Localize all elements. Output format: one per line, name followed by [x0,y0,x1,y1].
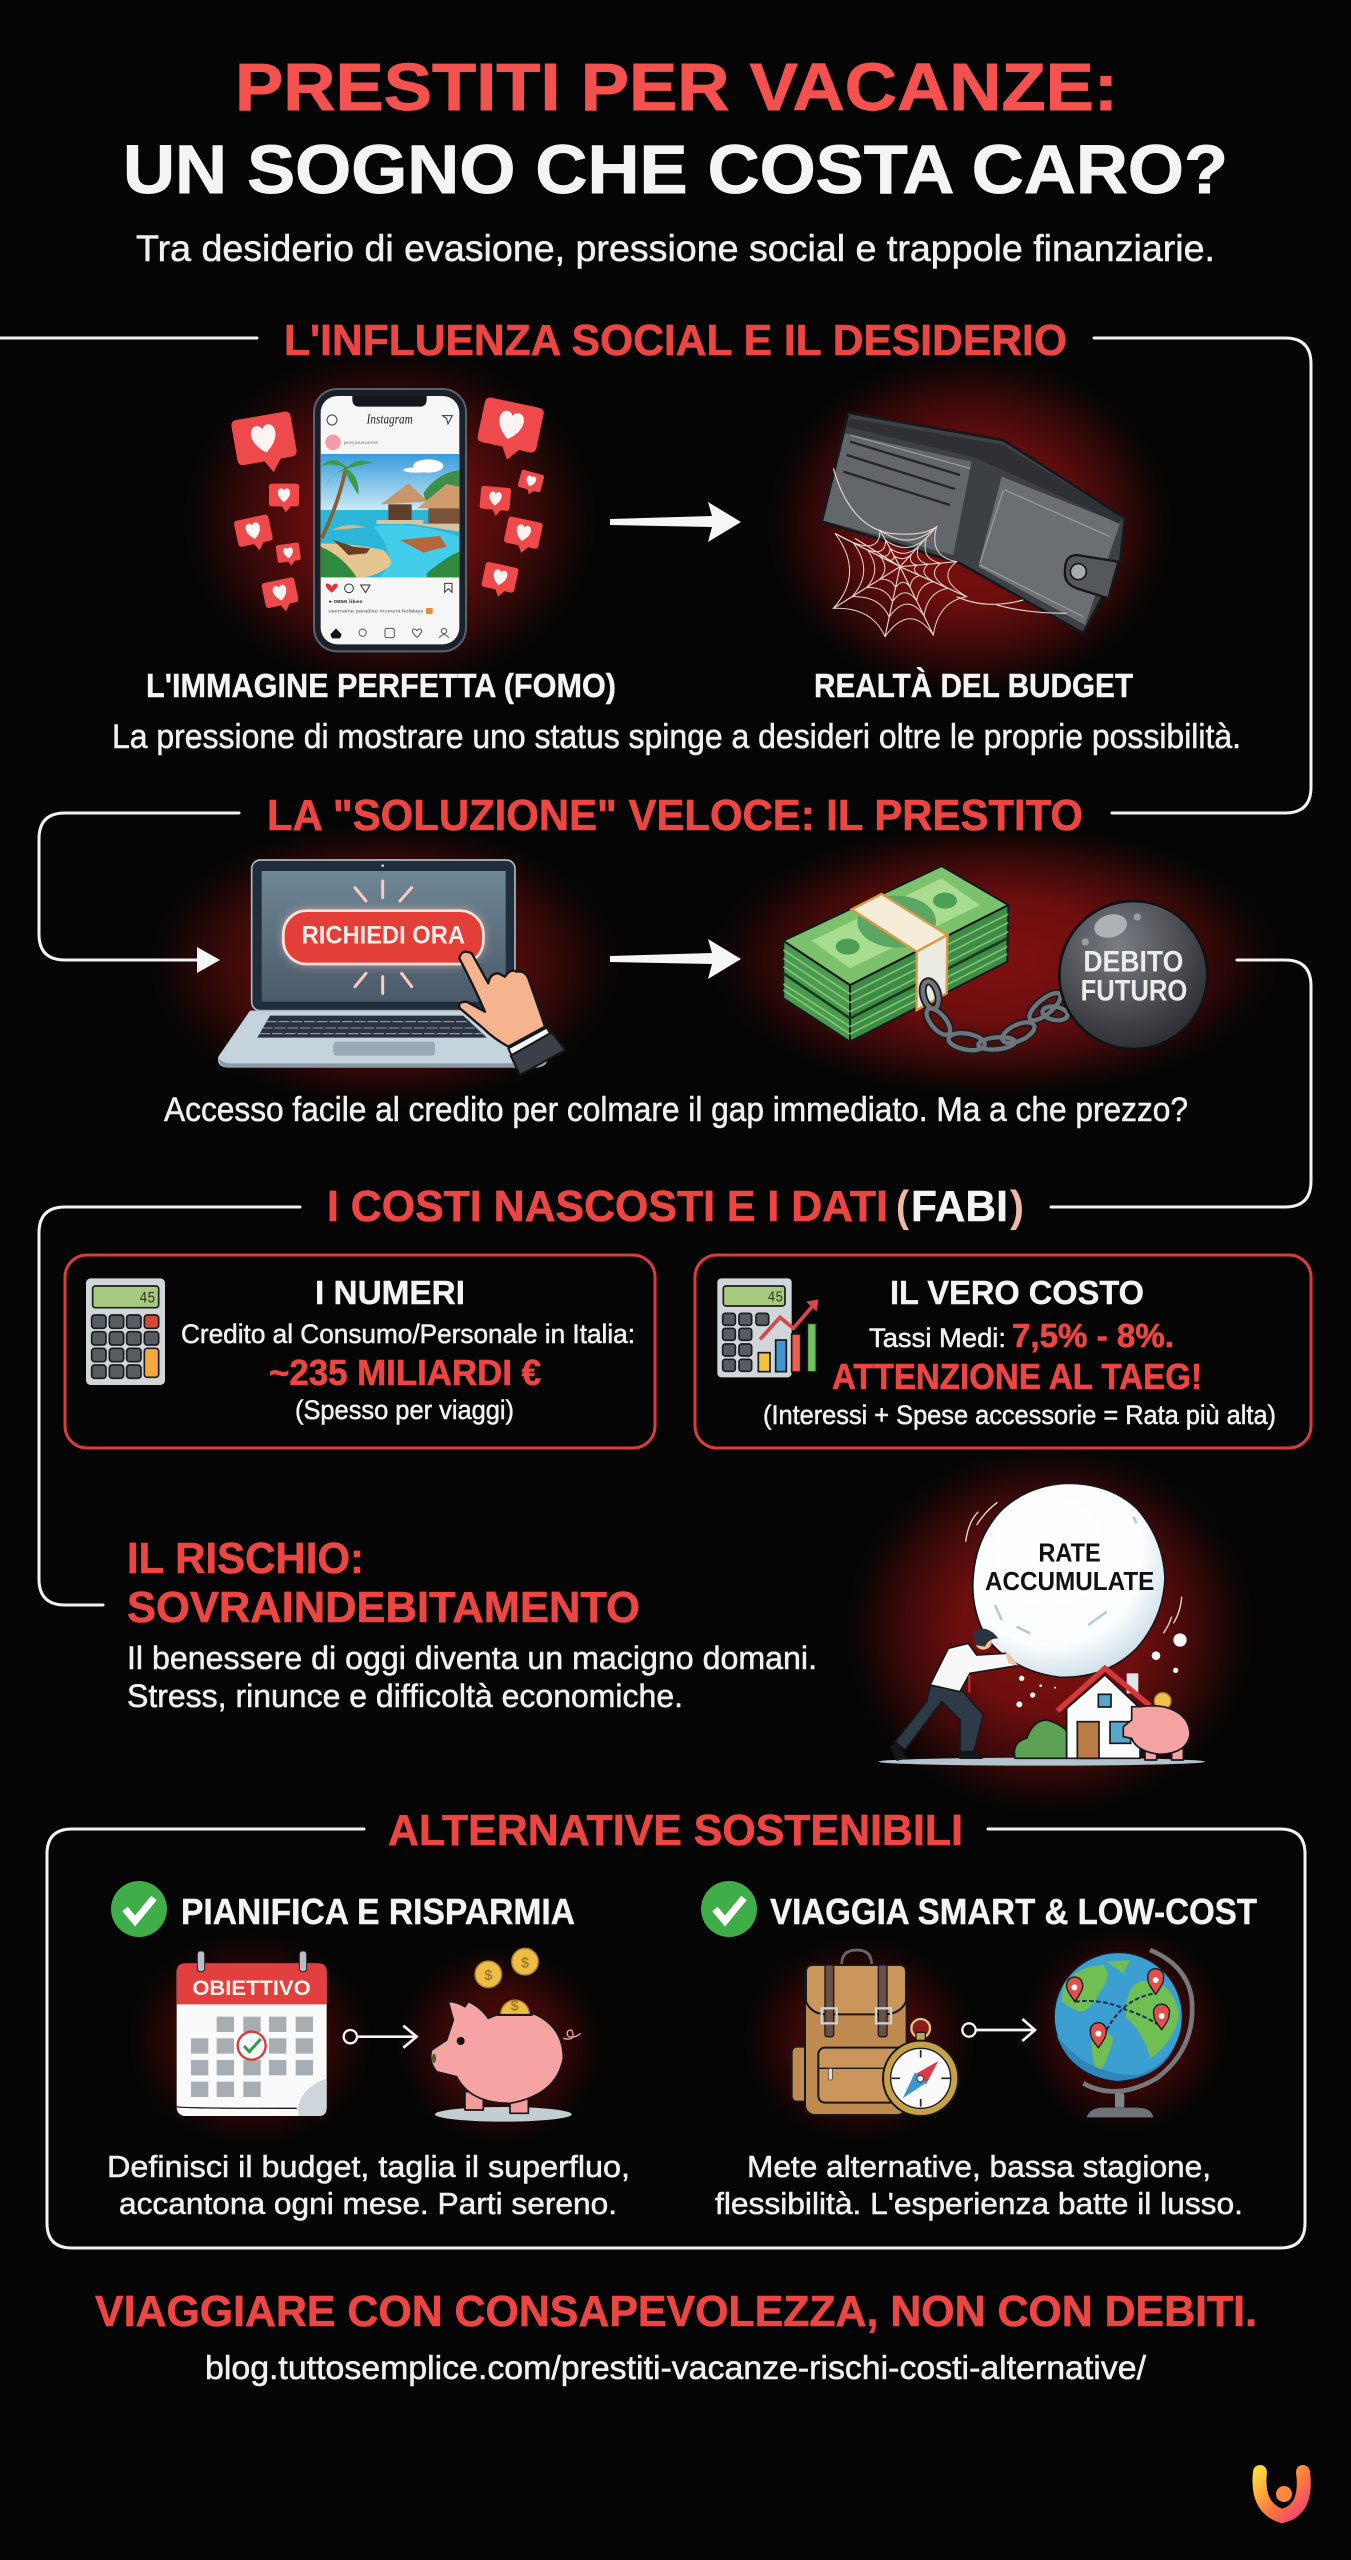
title: UN SOGNO CHE COSTA CARO? [123,131,1228,208]
panel: viaggia smart: VIAGGIA SMART & LOW-COST [770,1891,1257,1932]
icon: calendar and piggy bank: $ [484,1968,492,1984]
icon: cash stack chained to debt ball [783,866,1207,1053]
text block: il rischio: Stress, rinunce e difficoltà economiche. [127,1678,683,1714]
panel: i numeri [65,1255,655,1448]
icon: green check [701,1881,757,1937]
panel: i numeri: (Spesso per viaggi) [295,1395,514,1425]
subtitle: Tra desiderio di evasione, pressione social e trappole finanziarie. [136,228,1215,269]
icon: calendar and piggy bank: $ [511,1998,519,2014]
panel: viaggia smart: Mete alternative, bassa stagione, [747,2149,1211,2184]
arrow head [197,947,220,973]
icon: cash stack chained to debt ball: DEBITO [1083,946,1183,979]
icon: phone with Instagram post and hearts [230,389,545,651]
panel: il vero costo [695,1255,1311,1448]
icon: calculator: 45 [139,1290,155,1308]
panel: pianifica e risparmia [107,1881,630,2221]
heading: costi nascosti: FABI [911,1182,1008,1231]
icon: man pushing boulder of instalments: RATE [1038,1538,1101,1568]
icon: calendar and piggy bank [177,1948,581,2122]
panel: i numeri: Credito al Consumo/Personale in Italia: [181,1319,635,1349]
footer message: VIAGGIARE CON CONSAPEVOLEZZA, NON CON DEBITI. [95,2287,1257,2336]
panel: il vero costo: (Interessi + Spese accessorie = Rata più alta) [763,1400,1276,1430]
icon: man pushing boulder of instalments: ACCUMULATE [985,1566,1154,1596]
panel: i numeri: I NUMERI [315,1274,465,1311]
panel: pianifica e risparmia: PIANIFICA E RISPARMIA [181,1891,575,1932]
text block: il rischio: Il benessere di oggi diventa un macigno domani. [127,1640,817,1676]
text: pressione: La pressione di mostrare uno status spinge a desideri oltre le proprie possibilità. [112,718,1241,756]
panel: il vero costo: IL VERO COSTO [890,1274,1144,1311]
panel: i numeri: ~235 MILIARDI € [269,1352,541,1393]
icon: calendar and piggy bank: OBIETTIVO [192,1976,311,2000]
text: accesso: Accesso facile al credito per colmare il gap immediato. Ma a che prezzo? [164,1091,1188,1129]
panel: viaggia smart [701,1881,1257,2221]
icon: phone with Instagram post and hearts: username paradise moment holidays [328,609,424,614]
icon: man pushing boulder of instalments [878,1483,1205,1766]
icon: calculator with rising chart: 45 [768,1290,783,1306]
icon: laptop with button and hand: RICHIEDI ORA [302,922,465,949]
label: realtà del budget: REALTÀ DEL BUDGET [814,667,1133,704]
panel: il vero costo: Tassi Medi: [869,1323,1006,1353]
panel: viaggia smart: flessibilità. L'esperienza batte il lusso. [715,2186,1243,2221]
icon: green check [111,1881,167,1937]
label: immagine perfetta: L'IMMAGINE PERFETTA (FOMO) [146,667,616,704]
icon: phone with Instagram post and hearts: preciousunme [344,440,379,445]
icon: backpack compass and globe [792,1950,1192,2117]
heading: costi nascosti: ) [1010,1182,1024,1231]
text block: il rischio: SOVRAINDEBITAMENTO [127,1583,640,1632]
arrow [610,939,741,979]
arrow [610,502,741,542]
panel: pianifica e risparmia: accantona ogni mese. Parti sereno. [119,2186,617,2221]
text block: il rischio: IL RISCHIO: [127,1534,364,1583]
title [123,50,1228,208]
heading: influenza social: L'INFLUENZA SOCIAL E IL DESIDERIO [284,316,1067,365]
icon: empty wallet with cobweb [822,413,1125,637]
heading: soluzione: LA "SOLUZIONE" VELOCE: IL PRESTITO [267,791,1083,840]
heading: costi nascosti: ( [896,1182,909,1231]
icon: phone with Instagram post and hearts: Instagram [366,411,413,426]
title: PRESTITI PER VACANZE: [235,50,1118,125]
panel: pianifica e risparmia: Definisci il budget, taglia il superfluo, [107,2149,630,2184]
text block: il rischio [127,1534,817,1714]
heading: costi nascosti: I COSTI NASCOSTI E I DATI [327,1182,888,1231]
panel: il vero costo: ATTENZIONE AL TAEG! [832,1356,1202,1397]
icon: cash stack chained to debt ball: FUTURO [1081,975,1187,1008]
icon: laptop with button and hand [218,860,565,1075]
footer url: blog.tuttosemplice.com/prestiti-vacanze-rischi-costi-alternative/ [205,2349,1147,2386]
icon: calculator with rising chart [717,1278,818,1377]
heading: alternative sostenibili: ALTERNATIVE SOSTENIBILI [388,1806,963,1855]
logo [1259,2472,1304,2516]
icon: calendar and piggy bank: $ [521,1955,529,1971]
icon: calculator [86,1278,165,1385]
icon: phone with Instagram post and hearts: ● 0850 likes [328,599,363,604]
panel: il vero costo: 7,5% - 8%. [1012,1317,1174,1354]
